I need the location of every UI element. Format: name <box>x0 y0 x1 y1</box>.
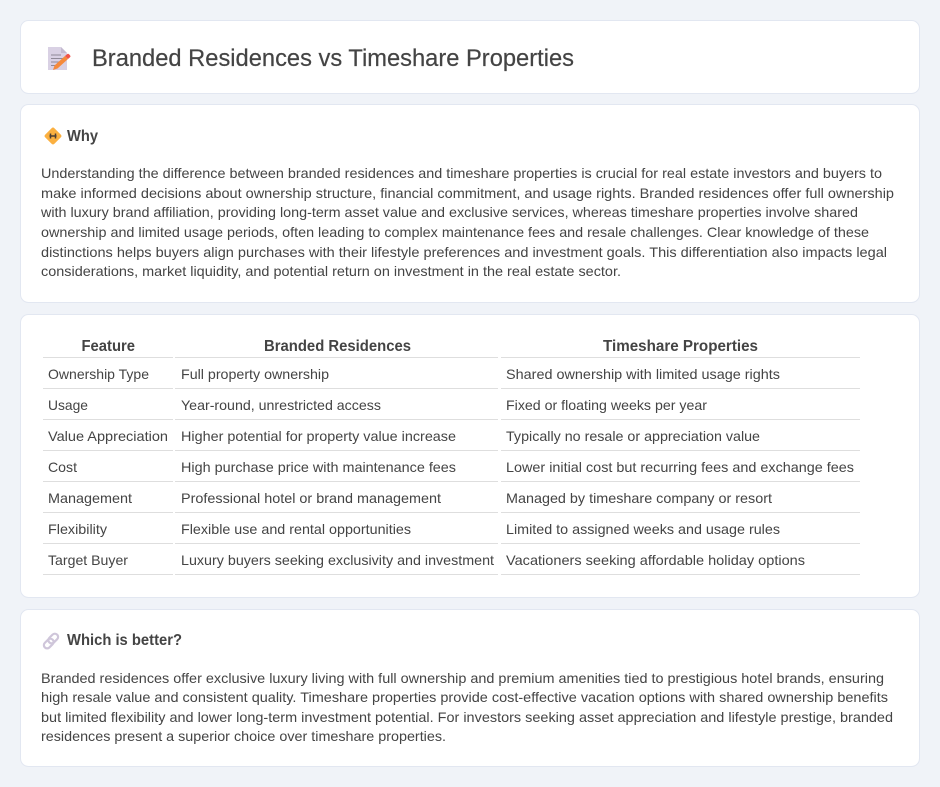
table row: ownership type: Full property ownership <box>181 366 329 382</box>
table row: usage: Year-round, unrestricted access <box>181 397 381 413</box>
text block: verdict: but limited flexibility and lower long-term investment potential. For investors seeking asset appreciation and lifestyle prestige, branded <box>41 709 893 725</box>
icon: chain link <box>43 632 59 650</box>
text block: verdict: residences present a superior choice over timeshare properties. <box>41 728 446 744</box>
table row: ownership type: Ownership Type <box>48 366 149 382</box>
table row: management: Professional hotel or brand management <box>181 490 441 506</box>
table row: flexibility: Flexible use and rental opportunities <box>181 521 411 537</box>
table row: cost <box>43 459 860 482</box>
text block: why explanation: with luxury brand affiliation, providing long-term asset value and exclusive services, whereas timeshare properties involve shared <box>40 204 858 220</box>
table row: management: Management <box>48 490 132 506</box>
icon: warning diamond <box>44 127 62 145</box>
table row: value appreciation: Higher potential for property value increase <box>181 428 456 444</box>
table header row: Feature <box>82 338 135 355</box>
table row: target buyer <box>43 552 860 574</box>
table header row <box>43 338 860 358</box>
text block: why explanation: ownership and limited usage periods, often leading to complex maintenance fees and resale challenges. Clear knowledge of these <box>41 224 869 240</box>
table row: target buyer: Target Buyer <box>48 552 128 568</box>
panel: comparison table <box>20 314 920 598</box>
table row: value appreciation <box>43 428 860 450</box>
table row: management <box>43 490 860 512</box>
table row: usage <box>43 397 860 420</box>
title: Branded Residences vs Timeshare Properties <box>92 45 574 72</box>
icon: document with pencil <box>48 47 70 70</box>
table row: value appreciation: Typically no resale or appreciation value <box>506 428 760 444</box>
table row: flexibility: Flexibility <box>48 521 107 537</box>
table row: flexibility <box>43 521 860 544</box>
text block: why explanation: Understanding the difference between branded residences and timeshare properties is crucial for real estate investors and buyers to <box>41 165 882 181</box>
heading: which is better: Which is better? <box>67 632 182 649</box>
table row: ownership type <box>43 366 860 388</box>
text block: verdict <box>41 670 893 744</box>
heading: why: Why <box>67 128 98 145</box>
table header row: Timeshare Properties <box>603 338 758 355</box>
table row: flexibility: Limited to assigned weeks and usage rules <box>506 521 780 537</box>
table row: usage: Usage <box>48 397 88 413</box>
table row: target buyer: Vacationers seeking affordable holiday options <box>506 552 805 568</box>
text block: verdict: Branded residences offer exclusive luxury living with full ownership and premium amenities tied to prestigious hotel brands, ensuring <box>41 670 884 686</box>
table header row: Branded Residences <box>264 338 411 355</box>
text block: why explanation: make informed decisions about ownership structure, financial commitment, and usage rights. Branded residences offer full ownership <box>41 185 894 201</box>
text block: why explanation: distinctions helps buyers align purchases with their lifestyle preferences and investment goals. This differentiation also impacts legal <box>41 244 887 260</box>
panel: why <box>20 104 920 302</box>
table row: cost: Lower initial cost but recurring fees and exchange fees <box>506 459 854 475</box>
table row: usage: Fixed or floating weeks per year <box>506 397 707 413</box>
text block: why explanation: considerations, market liquidity, and potential return on investment in the real estate sector. <box>41 263 621 279</box>
table row: target buyer: Luxury buyers seeking exclusivity and investment <box>181 552 494 568</box>
text block: why explanation <box>40 165 894 279</box>
table row: ownership type: Shared ownership with limited usage rights <box>506 366 780 382</box>
table row: management: Managed by timeshare company or resort <box>506 490 772 506</box>
table row: cost: High purchase price with maintenance fees <box>181 459 456 475</box>
table row: value appreciation: Value Appreciation <box>48 428 168 444</box>
text block: verdict: high resale value and consistent quality. Timeshare properties provide cost-effective vacation options with shared ownership benefits <box>41 689 888 705</box>
panel: which is better <box>20 610 920 766</box>
panel: page header <box>20 20 920 94</box>
table row: cost: Cost <box>48 459 77 475</box>
